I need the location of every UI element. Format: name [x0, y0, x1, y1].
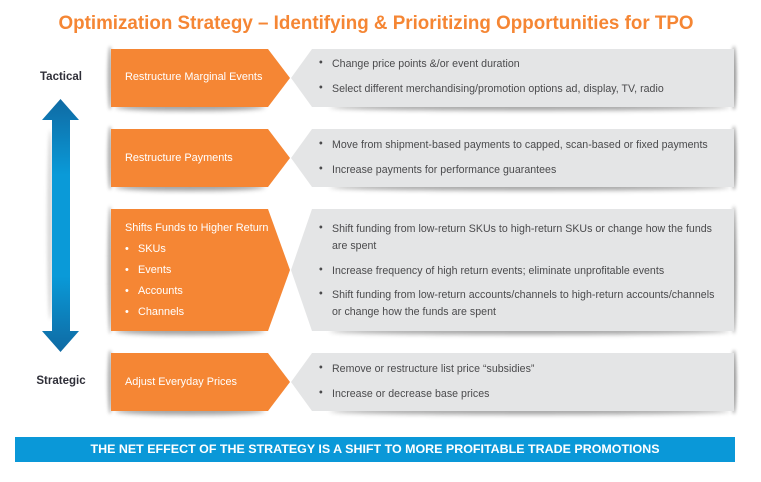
details text: •	[319, 222, 323, 234]
panel: gray details	[291, 129, 734, 187]
details text: •	[319, 138, 323, 150]
details text: •	[319, 264, 323, 276]
label text: Channels	[138, 306, 185, 318]
details text: Shift funding from low-return accounts/channels to high-return accounts/channels	[332, 289, 714, 301]
label text: Events	[138, 264, 172, 276]
banner	[15, 437, 735, 462]
label text: SKUs	[138, 243, 166, 255]
row: adjust everyday prices	[108, 350, 736, 415]
details text: •	[319, 162, 323, 174]
details text: Select different merchandising/promotion options ad, display, TV, radio	[332, 83, 664, 95]
label text: •	[125, 243, 129, 255]
label: Tactical: Tactical	[40, 71, 82, 83]
details text: or change how the funds are spent	[332, 306, 496, 318]
row: restructure payments	[108, 126, 736, 191]
details text: Shift funding from low-return SKUs to high-return SKUs or change how the funds	[332, 223, 712, 235]
row: restructure marginal events	[108, 46, 736, 111]
label text: •	[125, 306, 129, 318]
panel: gray details	[291, 209, 734, 331]
label text: •	[125, 285, 129, 297]
row: shift funds	[108, 206, 736, 335]
label text: Accounts	[138, 285, 183, 297]
details text: Increase payments for performance guarantees	[332, 164, 556, 176]
label text: Restructure Marginal Events	[125, 71, 263, 83]
label text: Adjust Everyday Prices	[125, 376, 238, 388]
panel: gray details	[291, 353, 734, 411]
details text: Change price points &/or event duration	[332, 58, 520, 70]
details text: Increase frequency of high return events; eliminate unprofitable events	[332, 265, 664, 277]
panel: orange label	[111, 209, 290, 331]
details text: •	[319, 56, 323, 68]
label text: Shifts Funds to Higher Return	[125, 222, 268, 234]
details text: are spent	[332, 240, 376, 252]
label text: •	[125, 264, 129, 276]
details text: Increase or decrease base prices	[332, 388, 489, 400]
title: Optimization Strategy – Identifying & Prioritizing Opportunities for TPO	[58, 12, 694, 34]
details text: •	[319, 386, 323, 398]
panel: orange label	[111, 129, 290, 187]
details text: •	[319, 82, 323, 94]
details text: •	[319, 288, 323, 300]
panel: gray details	[291, 49, 734, 107]
panel: orange label	[111, 49, 290, 107]
label text: Restructure Payments	[125, 152, 233, 164]
panel: orange label	[111, 353, 290, 411]
label: Strategic: Strategic	[36, 375, 86, 387]
details text: •	[319, 362, 323, 374]
arrow: tactical to strategic	[42, 99, 79, 352]
banner text: THE NET EFFECT OF THE STRATEGY IS A SHIFT TO MORE PROFITABLE TRADE PROMOTIONS	[90, 444, 660, 456]
details text: Move from shipment-based payments to capped, scan-based or fixed payments	[332, 139, 708, 151]
details text: Remove or restructure list price “subsidies”	[332, 363, 535, 375]
